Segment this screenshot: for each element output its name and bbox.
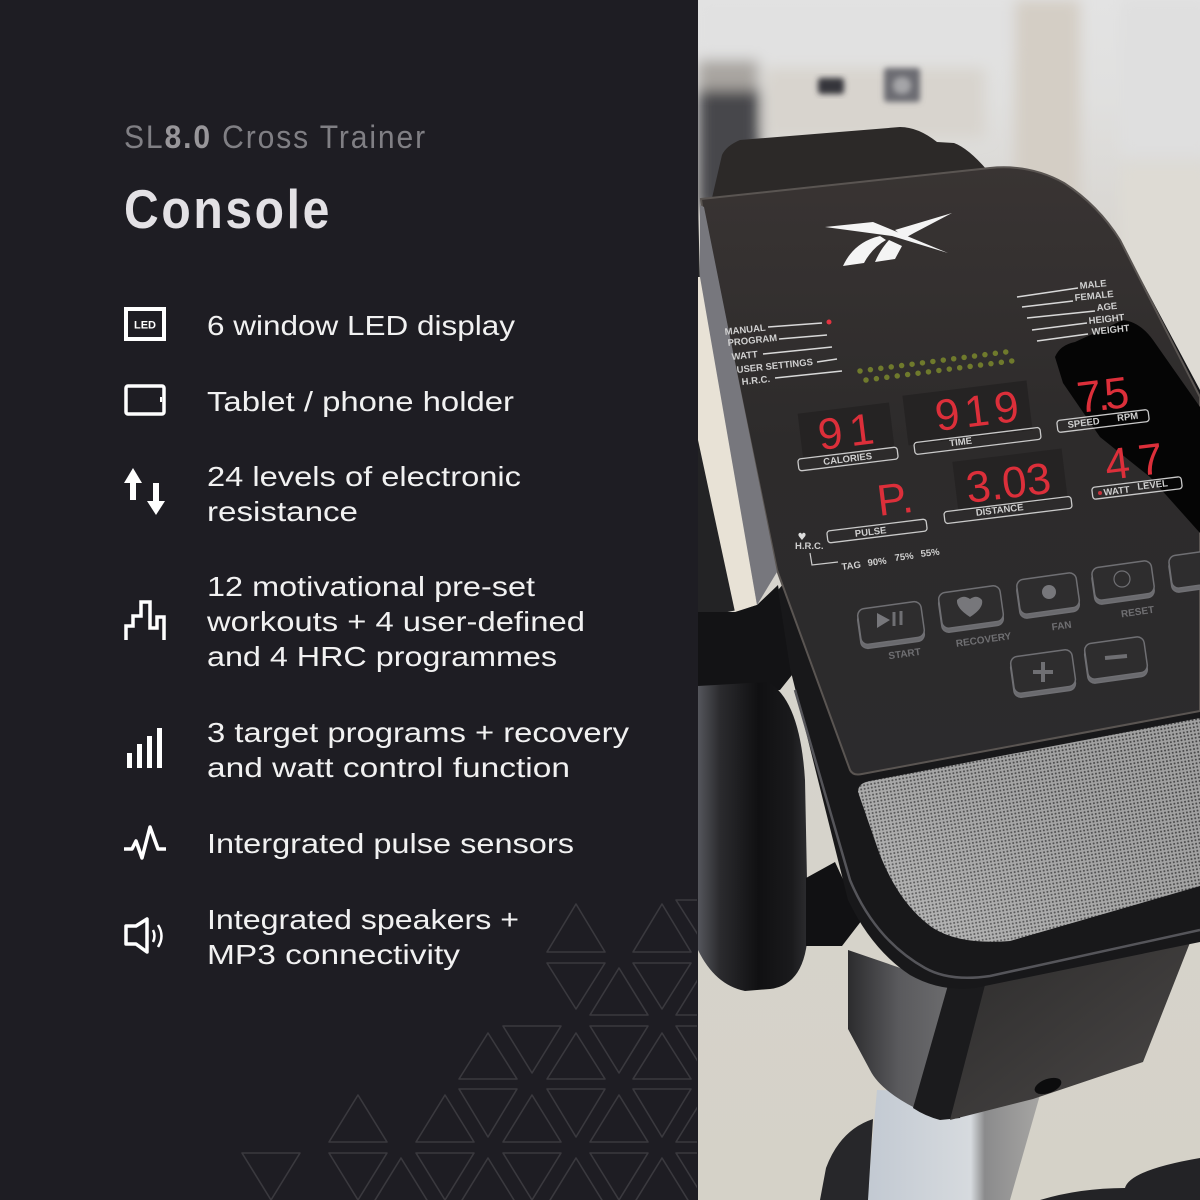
text: workouts: 12 motivational pre-set	[207, 571, 535, 602]
icon: signal bars	[127, 728, 162, 768]
icon: skyline profile	[126, 602, 164, 640]
heart rate zones: 75%	[894, 551, 915, 564]
feature: pulse sensors	[124, 827, 574, 859]
panel: dark text background	[0, 0, 698, 1200]
left menu labels: H.R.C.	[741, 374, 771, 388]
readout labels: CALORIES	[823, 451, 873, 468]
subtitle: SL8.0 Cross Trainer	[124, 119, 427, 155]
left menu labels: MANUAL	[724, 323, 766, 338]
readout labels	[823, 411, 1169, 540]
heart rate zones: 55%	[920, 547, 941, 560]
digital readouts: 91	[815, 404, 877, 460]
right menu labels: WEIGHT	[1091, 323, 1130, 338]
control buttons	[857, 548, 1200, 698]
digital readouts: 3.03	[963, 454, 1054, 513]
readout labels: DISTANCE	[975, 502, 1024, 519]
reflection on display	[1055, 320, 1200, 533]
button labels: RESET	[1120, 605, 1155, 620]
title: Console	[124, 178, 332, 240]
text: pulse sensors: Intergrated pulse sensors	[207, 828, 574, 859]
text: target programs: and watt control function	[207, 752, 570, 783]
readout labels: LEVEL	[1137, 478, 1169, 493]
digit windows	[798, 381, 1068, 512]
icon: LED	[126, 309, 164, 339]
dark post behind rod	[698, 200, 757, 618]
right menu labels	[1017, 278, 1130, 341]
right menu labels: FEMALE	[1074, 289, 1114, 304]
photo: console of the cross trainer	[698, 0, 1200, 1200]
left menu labels	[724, 320, 842, 388]
collar	[698, 585, 792, 690]
feature: target programs	[127, 717, 629, 783]
LED dot bars	[860, 351, 1019, 380]
text: target programs: 3 target programs + recovery	[207, 717, 629, 748]
logo	[825, 213, 952, 266]
button labels	[888, 605, 1155, 662]
handle connector	[806, 862, 862, 946]
icon: speaker	[126, 919, 162, 952]
button labels: START	[888, 647, 922, 662]
heart rate zones: TAG	[841, 560, 862, 573]
feature: tablet holder	[126, 386, 514, 417]
text: tablet holder: Tablet / phone holder	[207, 386, 514, 417]
speaker grille	[858, 718, 1200, 942]
base cover	[820, 1119, 873, 1200]
heart rate zones	[795, 532, 941, 573]
icon: up and down arrows	[124, 468, 165, 515]
readout labels: SPEED	[1067, 416, 1100, 431]
digital readouts: 7.5	[1074, 368, 1132, 423]
digital readouts	[819, 377, 1159, 516]
digital readouts: 919	[932, 382, 1022, 441]
heart rate zones: H.R.C.	[795, 541, 824, 552]
feature: speakers	[126, 904, 519, 970]
right menu labels: AGE	[1096, 301, 1118, 314]
text: resistance: resistance	[207, 496, 358, 527]
left menu labels: PROGRAM	[727, 333, 778, 349]
text: LED display: 6 window LED display	[207, 310, 515, 341]
readout labels: WATT	[1103, 484, 1131, 499]
text: speakers: MP3 connectivity	[207, 939, 460, 970]
feature: resistance	[124, 461, 521, 527]
icon: pulse	[124, 827, 166, 858]
heart rate zones: 90%	[867, 556, 888, 569]
tablet holder clip	[712, 127, 987, 198]
heart rate zones: ♥	[798, 532, 807, 543]
feature: LED display	[126, 309, 515, 341]
right menu labels: HEIGHT	[1088, 312, 1125, 327]
digital readouts: P.	[874, 473, 916, 526]
right menu labels: MALE	[1079, 278, 1107, 292]
text: workouts: workouts + 4 user-defined	[206, 606, 585, 637]
readout labels: TIME	[949, 436, 973, 449]
triangle pattern	[242, 900, 734, 1200]
pole	[867, 1090, 1040, 1200]
left menu labels: WATT	[731, 349, 759, 363]
feature: workouts	[126, 571, 585, 672]
readout labels: PULSE	[854, 525, 887, 540]
gray side strip	[700, 205, 777, 605]
room background	[698, 0, 1200, 1200]
button labels: FAN	[1051, 620, 1072, 633]
readout labels: RPM	[1117, 411, 1139, 424]
readout label boxes	[798, 409, 1182, 543]
icon: LED: LED	[134, 320, 156, 332]
text: workouts: and 4 HRC programmes	[207, 641, 557, 672]
cream rod	[698, 277, 757, 612]
console frame	[778, 240, 1200, 989]
button labels: RECOVERY	[955, 631, 1012, 650]
text: speakers: Integrated speakers +	[207, 904, 519, 935]
bottom right covers	[1040, 1158, 1200, 1200]
text: resistance: 24 levels of electronic	[207, 461, 521, 492]
digital readouts: 47	[1102, 434, 1166, 490]
box under console	[848, 935, 1193, 1120]
console face	[701, 167, 1200, 775]
left menu labels: USER SETTINGS	[736, 357, 813, 376]
icon: tablet	[126, 386, 164, 414]
handle tube	[698, 682, 808, 991]
